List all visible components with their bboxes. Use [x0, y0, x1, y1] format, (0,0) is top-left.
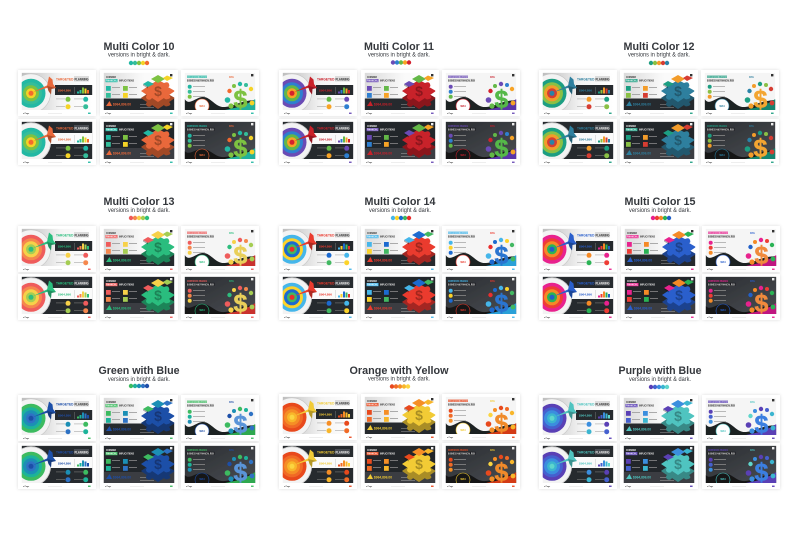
bright slide: corporate finance — [702, 395, 780, 441]
dark slide: corporate finance — [442, 274, 520, 320]
panel: Multi Color 10 — [11, 41, 259, 165]
panel: Multi Color 15 — [532, 196, 780, 320]
bright slide: financial implications — [621, 226, 699, 272]
subtitle: versions in bright & dark. — [368, 52, 430, 58]
dark slide: financial implications — [361, 274, 439, 320]
colour swatch dots — [129, 61, 149, 65]
heading: Multi Color 13: Multi Color 13 — [104, 196, 174, 208]
bright slide: financial implications — [361, 226, 439, 272]
bright slide: financial implications — [100, 70, 178, 116]
dark slide: corporate finance — [701, 119, 779, 165]
panel: Purple with Blue — [532, 365, 780, 489]
bright slide: financial implications — [361, 70, 439, 116]
dark slide: financial implications — [100, 119, 178, 165]
colour swatch dots — [129, 216, 149, 220]
heading: Multi Color 14: Multi Color 14 — [364, 196, 436, 208]
panel: Green with Blue — [11, 365, 259, 489]
bright slide: corporate finance — [181, 226, 259, 272]
bright slide: targeted planning — [272, 70, 357, 116]
colour swatch dots — [649, 385, 669, 389]
dark slide: corporate finance — [181, 274, 259, 320]
subtitle: versions in bright & dark. — [368, 376, 430, 382]
dark slide: financial implications — [361, 119, 439, 165]
dark slide: financial implications — [100, 443, 178, 489]
dark slide: corporate finance — [702, 274, 780, 320]
bright slide: targeted planning — [12, 226, 96, 272]
dark slide: financial implications — [620, 119, 698, 165]
colour swatch dots — [651, 216, 671, 220]
dark slide: corporate finance — [181, 443, 259, 489]
bright slide: corporate finance — [442, 226, 520, 272]
subtitle: versions in bright & dark. — [629, 207, 691, 214]
dark slide: financial implications — [620, 443, 698, 489]
bright slide: corporate finance — [442, 394, 520, 440]
bright slide: targeted planning — [532, 395, 617, 441]
dark slide: targeted planning — [532, 443, 617, 489]
bright slide: targeted planning — [532, 226, 617, 272]
bright slide: corporate finance — [442, 70, 520, 116]
panel: Orange with Yellow — [272, 365, 520, 489]
bright slide: financial implications — [100, 226, 178, 272]
subtitle: versions in bright & dark. — [628, 52, 690, 58]
bright slide: financial implications — [100, 395, 178, 441]
dark slide: targeted planning — [532, 119, 617, 165]
colour swatch dots — [129, 384, 149, 388]
heading: Orange with Yellow: Orange with Yellow — [350, 365, 449, 377]
bright slide: financial implications — [361, 394, 439, 440]
subtitle: versions in bright & dark. — [369, 207, 431, 214]
dark slide: financial implications — [100, 274, 178, 320]
colour swatch dots — [391, 216, 411, 220]
bright slide: corporate finance — [181, 395, 259, 441]
panel: Multi Color 11 — [272, 41, 520, 165]
bright slide: targeted planning — [532, 70, 617, 116]
heading: Multi Color 15: Multi Color 15 — [624, 196, 696, 208]
dark slide: corporate finance — [181, 119, 259, 165]
panel: Multi Color 12 — [532, 41, 779, 165]
panel: Multi Color 14 — [272, 196, 520, 320]
dark slide: corporate finance — [442, 119, 520, 165]
dark slide: financial implications — [621, 274, 699, 320]
bright slide: financial implications — [620, 395, 698, 441]
colour swatch dots — [649, 61, 669, 65]
heading: Multi Color 12: Multi Color 12 — [624, 41, 694, 53]
bright slide: targeted planning — [272, 226, 357, 272]
dark slide: targeted planning — [11, 443, 96, 489]
dark slide: targeted planning — [532, 274, 617, 320]
subtitle: versions in bright & dark. — [108, 376, 170, 383]
heading: Multi Color 11: Multi Color 11 — [364, 41, 434, 53]
heading: Multi Color 10: Multi Color 10 — [104, 41, 174, 53]
heading: Purple with Blue: Purple with Blue — [618, 365, 702, 377]
bright slide: corporate finance — [701, 70, 779, 116]
dark slide: targeted planning — [272, 443, 357, 489]
bright slide: targeted planning — [272, 394, 357, 440]
bright slide: financial implications — [620, 70, 698, 116]
subtitle: versions in bright & dark. — [108, 52, 170, 58]
dark slide: corporate finance — [702, 443, 780, 489]
subtitle: versions in bright & dark. — [629, 376, 691, 383]
bright slide: targeted planning — [12, 395, 96, 441]
dark slide: targeted planning — [11, 119, 96, 165]
heading: Green with Blue: Green with Blue — [98, 365, 180, 377]
dark slide: targeted planning — [11, 274, 96, 320]
dark slide: financial implications — [361, 443, 439, 489]
subtitle: versions in bright & dark. — [108, 207, 170, 214]
dark slide: targeted planning — [272, 274, 357, 320]
colour swatch dots — [391, 60, 411, 65]
bright slide: corporate finance — [181, 70, 259, 116]
panel: Multi Color 13 — [11, 196, 259, 320]
dark slide: corporate finance — [442, 443, 520, 489]
bright slide: corporate finance — [702, 226, 780, 272]
colour swatch dots — [390, 384, 410, 389]
dark slide: targeted planning — [272, 119, 357, 165]
bright slide: targeted planning — [12, 70, 96, 116]
